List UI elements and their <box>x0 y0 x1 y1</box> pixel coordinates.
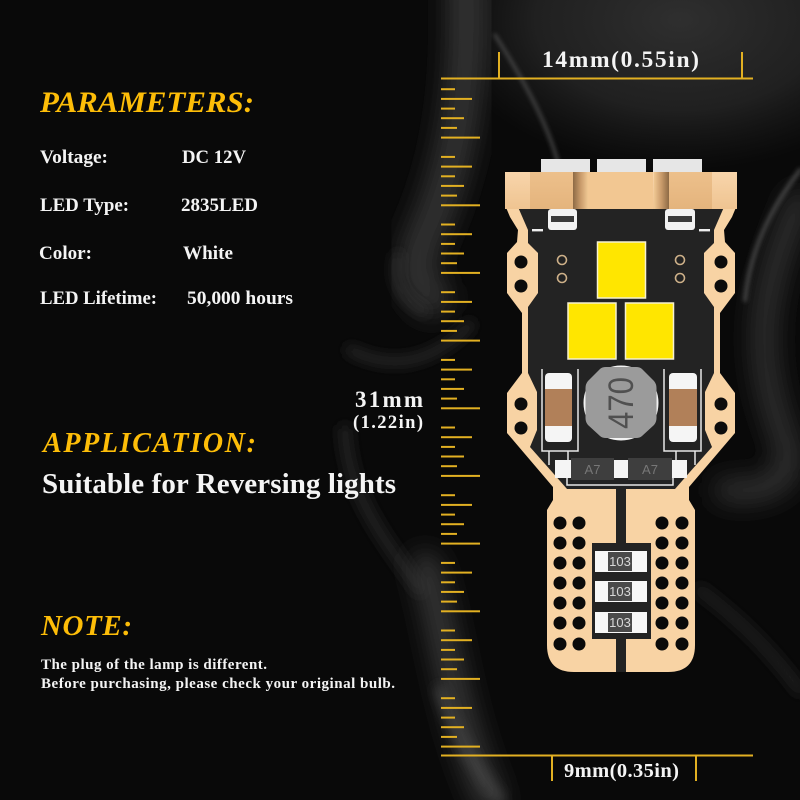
dimension label: height: (1.22in) <box>353 413 423 433</box>
note text: Before purchasing, please check your original bulb. <box>41 676 395 692</box>
parameter: color: White <box>183 244 233 264</box>
small vias <box>558 256 684 282</box>
black board <box>518 207 724 672</box>
note text <box>41 657 395 692</box>
parameter list <box>39 148 293 309</box>
parameter: color: Color: <box>39 244 92 264</box>
ruler: vertical scale <box>441 88 480 748</box>
resistors 103: 103 <box>609 615 631 630</box>
heading: note: NOTE: <box>40 610 132 642</box>
diodes A7 <box>555 458 687 480</box>
dimension: bottom width: 9mm(0.35in) <box>564 760 679 782</box>
lower copper holes <box>554 516 688 650</box>
white traces <box>542 369 701 485</box>
diodes A7: A7 <box>585 462 600 477</box>
parameter: voltage: Voltage: <box>40 148 108 168</box>
heading: application: APPLICATION: <box>41 428 256 459</box>
resistors 103: 103 <box>609 584 631 599</box>
dimension label: height: 31mm <box>355 387 423 412</box>
parameter: voltage: DC 12V <box>182 148 247 168</box>
parameter: lifetime <box>40 289 293 309</box>
parameter: color <box>39 244 233 264</box>
parameter: lifetime: 50,000 hours <box>187 289 293 309</box>
note text: The plug of the lamp is different. <box>41 657 267 673</box>
inductor 470: 470 <box>602 377 641 429</box>
dimension: top width: 14mm(0.55in) <box>542 47 699 73</box>
inductor 470 <box>584 366 658 440</box>
LED chips <box>568 242 674 359</box>
top white contacts <box>541 159 702 173</box>
parameter: LED type: 2835LED <box>181 196 258 216</box>
copper side holes <box>514 256 728 434</box>
parameter: lifetime: LED Lifetime: <box>40 289 157 309</box>
resistors 103 <box>595 551 647 633</box>
copper outline <box>505 205 737 672</box>
parameter: voltage <box>40 148 247 168</box>
dimension label: height <box>353 387 423 433</box>
capacitors <box>545 373 697 442</box>
resistors 103: 103 <box>609 554 631 569</box>
solder joints <box>532 209 710 231</box>
diodes A7: A7 <box>642 462 658 477</box>
parameter: LED type: LED Type: <box>40 196 129 216</box>
application text: Suitable for Reversing lights <box>42 468 396 500</box>
top metal cap <box>505 172 737 209</box>
parameter: LED type <box>40 196 258 216</box>
LED bulb circuit board <box>505 159 737 672</box>
heading: parameters: PARAMETERS: <box>39 87 254 119</box>
